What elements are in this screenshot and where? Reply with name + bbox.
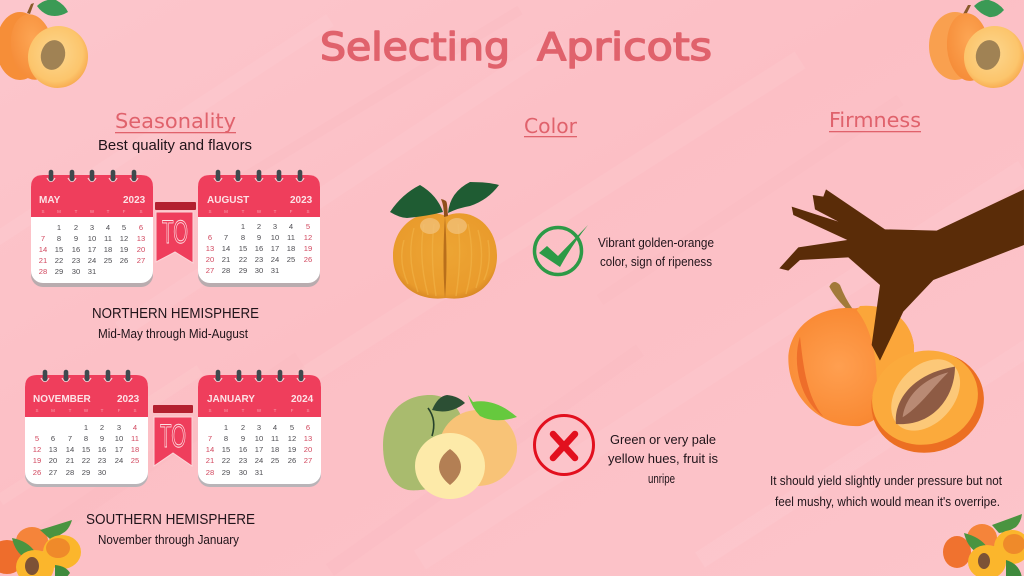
banner: to (south): TO <box>160 418 186 454</box>
calendar: August 2023: 1 <box>241 222 245 231</box>
calendar: August 2023: 3 <box>273 222 277 231</box>
calendar: August 2023: 29 <box>239 266 247 275</box>
calendar: January 2024: 7 <box>208 434 212 443</box>
calendar: January 2024: 18 <box>271 445 279 454</box>
calendar: May 2023: 5 <box>122 223 126 232</box>
calendar: August 2023: 23 <box>255 255 263 264</box>
calendar: August 2023: 7 <box>224 233 228 242</box>
calendar: August 2023: 8 <box>241 233 245 242</box>
calendar: May 2023: 25 <box>104 256 112 265</box>
calendar: January 2024: 31 <box>255 468 263 477</box>
calendar: August 2023: 26 <box>304 255 312 264</box>
calendar: January 2024 <box>198 372 321 487</box>
heading: color: Color <box>524 114 578 138</box>
calendar: November 2023: 24 <box>115 456 123 465</box>
calendar: November 2023: 30 <box>98 468 106 477</box>
calendar: November 2023: T <box>101 408 104 413</box>
calendar: November 2023: S <box>35 408 39 413</box>
calendar: January 2024: 12 <box>288 434 296 443</box>
calendar: January 2024: 22 <box>222 456 230 465</box>
calendar: August 2023: 6 <box>208 233 212 242</box>
calendar: November 2023: 18 <box>131 445 139 454</box>
calendar: November 2023: 4 <box>133 423 137 432</box>
label: northern hemisphere: NORTHERN HEMISPHERE <box>92 305 259 322</box>
calendar: May 2023: MAY <box>39 195 61 206</box>
calendar: August 2023: 31 <box>271 266 279 275</box>
calendar: November 2023: 12 <box>33 445 41 454</box>
calendar: August 2023: 28 <box>222 266 230 275</box>
text: unripe colour: unripe <box>648 472 675 486</box>
calendar: November 2023: 2 <box>100 423 104 432</box>
calendar: August 2023: 19 <box>304 244 312 253</box>
calendar: January 2024: 15 <box>222 445 230 454</box>
calendar: November 2023 <box>25 372 148 487</box>
calendar: May 2023: 29 <box>55 267 63 276</box>
calendar: January 2024: 16 <box>239 445 247 454</box>
calendar: August 2023: 2023 <box>290 195 313 206</box>
calendar: May 2023: 4 <box>106 223 110 232</box>
apricot stem <box>829 282 853 312</box>
title: Selecting <box>320 25 510 69</box>
calendar: January 2024: 1 <box>224 423 228 432</box>
calendar: November 2023: 11 <box>131 434 139 443</box>
text: southern dates: November through January <box>98 533 240 547</box>
calendar: May 2023 <box>31 172 153 287</box>
calendar: May 2023: S <box>41 209 45 214</box>
calendar: August 2023: S <box>208 209 212 214</box>
calendar: January 2024: T <box>274 408 277 413</box>
calendar: January 2024: 21 <box>206 456 214 465</box>
calendar: May 2023: 19 <box>120 245 128 254</box>
calendar: January 2024: T <box>242 408 245 413</box>
text: firmness description: It should yield slightly under pressure but not <box>770 474 1002 488</box>
calendar: May 2023: 18 <box>104 245 112 254</box>
calendar: August 2023: 20 <box>206 255 214 264</box>
calendar: January 2024: 13 <box>304 434 312 443</box>
calendar: August 2023: 11 <box>287 233 295 242</box>
calendar: May 2023: 24 <box>88 256 96 265</box>
calendar: November 2023: 20 <box>49 456 57 465</box>
text: firmness description <box>770 474 1002 509</box>
calendar: August 2023: 13 <box>206 244 214 253</box>
calendar: January 2024: 14 <box>206 445 214 454</box>
icon: apricot top left <box>0 0 94 94</box>
icon: apricots bottom left <box>0 520 81 576</box>
calendar: May 2023: 28 <box>39 267 47 276</box>
calendar: January 2024: F <box>291 408 294 413</box>
calendar: November 2023: 15 <box>82 445 90 454</box>
calendar: January 2024: 9 <box>241 434 245 443</box>
banner: to (south) <box>153 405 193 466</box>
calendar: January 2024: 3 <box>257 423 261 432</box>
calendar: January 2024: 25 <box>271 456 279 465</box>
calendar: August 2023: 5 <box>306 222 310 231</box>
calendar: May 2023: 14 <box>39 245 47 254</box>
calendar: August 2023: 21 <box>222 255 230 264</box>
calendar: January 2024: 2024 <box>291 394 314 405</box>
text: unripe colour: yellow hues, fruit is <box>608 452 718 466</box>
calendar: January 2024: JANUARY <box>207 394 255 405</box>
calendar: May 2023: T <box>75 209 78 214</box>
calendar: August 2023: T <box>242 209 245 214</box>
text: ripe colour <box>598 236 714 269</box>
calendar: November 2023: 14 <box>66 445 74 454</box>
calendar: May 2023: 10 <box>88 234 96 243</box>
calendar: August 2023: 2 <box>257 222 261 231</box>
calendar: November 2023: 5 <box>35 434 39 443</box>
calendar: November 2023: 7 <box>68 434 72 443</box>
calendar: August 2023: 18 <box>287 244 295 253</box>
calendar: November 2023: 8 <box>84 434 88 443</box>
calendar: August 2023: AUGUST <box>207 195 249 206</box>
calendar: May 2023: 11 <box>104 234 112 243</box>
calendar: August 2023: 12 <box>304 233 312 242</box>
calendar: November 2023: 6 <box>51 434 55 443</box>
banner: to (north) <box>155 202 196 263</box>
heading: firmness: Firmness <box>829 108 921 132</box>
calendar: May 2023: 16 <box>72 245 80 254</box>
calendar: January 2024: 10 <box>255 434 263 443</box>
calendar: May 2023: 27 <box>137 256 145 265</box>
calendar: May 2023: M <box>57 209 61 214</box>
calendar: August 2023: 25 <box>287 255 295 264</box>
calendar: November 2023: 25 <box>131 456 139 465</box>
calendar: May 2023: 21 <box>39 256 47 265</box>
calendar: August 2023: 30 <box>255 266 263 275</box>
calendar: May 2023: W <box>90 209 95 214</box>
calendar: August 2023 <box>198 172 320 287</box>
calendar: January 2024: 27 <box>304 456 312 465</box>
calendar: August 2023: 24 <box>271 255 279 264</box>
calendar: August 2023: 16 <box>255 244 263 253</box>
subheading: best quality: Best quality and flavors <box>98 137 252 154</box>
calendar: January 2024: 24 <box>255 456 263 465</box>
calendar: August 2023: F <box>290 209 293 214</box>
calendar: August 2023: 14 <box>222 244 230 253</box>
calendar: August 2023: M <box>224 209 228 214</box>
icon: red cross <box>534 416 594 474</box>
text: ripe colour: Vibrant golden-orange <box>598 236 714 250</box>
calendar: May 2023: 2 <box>74 223 78 232</box>
icon: ripe apricot <box>390 182 499 299</box>
calendar: November 2023: 28 <box>66 468 74 477</box>
calendar: May 2023: 20 <box>137 245 145 254</box>
calendar: November 2023: F <box>118 408 121 413</box>
calendar: August 2023: 9 <box>257 233 261 242</box>
calendar: May 2023: 7 <box>41 234 45 243</box>
calendar: May 2023: 9 <box>74 234 78 243</box>
calendar: January 2024: 6 <box>306 423 310 432</box>
calendar: January 2024: 11 <box>271 434 279 443</box>
calendar: May 2023: 17 <box>88 245 96 254</box>
calendar: May 2023: F <box>123 209 126 214</box>
calendar: November 2023: M <box>51 408 55 413</box>
calendar: August 2023: T <box>274 209 277 214</box>
calendar: November 2023: 23 <box>98 456 106 465</box>
calendar: January 2024: 20 <box>304 445 312 454</box>
label: southern hemisphere: SOUTHERN HEMISPHERE <box>86 511 255 528</box>
calendar: August 2023: 15 <box>239 244 247 253</box>
calendar: May 2023: 30 <box>72 267 80 276</box>
text: unripe colour: Green or very pale <box>610 433 716 447</box>
calendar: January 2024: 19 <box>288 445 296 454</box>
illustration: apricot squeezed by hand <box>779 189 1024 465</box>
text: firmness description: feel mushy, which would mean it's overripe. <box>775 495 1000 509</box>
calendar: May 2023: 2023 <box>123 195 146 206</box>
calendar: August 2023: 27 <box>206 266 214 275</box>
calendar: January 2024: M <box>224 408 228 413</box>
icon: apricots bottom right <box>943 514 1024 576</box>
calendar: November 2023: NOVEMBER <box>33 394 92 405</box>
calendar: May 2023: 8 <box>57 234 61 243</box>
calendar: May 2023: T <box>107 209 110 214</box>
calendar: May 2023: 3 <box>90 223 94 232</box>
halved apricot <box>860 339 995 465</box>
calendar: November 2023: 21 <box>66 456 74 465</box>
calendar: January 2024: 17 <box>255 445 263 454</box>
text: northern dates: Mid-May through Mid-August <box>98 327 248 341</box>
calendar: November 2023: S <box>133 408 137 413</box>
text: unripe colour <box>608 433 718 486</box>
calendar: January 2024: 2 <box>241 423 245 432</box>
calendar: January 2024: W <box>257 408 262 413</box>
calendar: November 2023: 26 <box>33 468 41 477</box>
calendar: November 2023: 22 <box>82 456 90 465</box>
banner: to (north): TO <box>162 214 188 250</box>
calendar: January 2024: 26 <box>288 456 296 465</box>
calendar: August 2023: 4 <box>289 222 293 231</box>
calendar: November 2023: 19 <box>33 456 41 465</box>
title: Apricots <box>537 25 712 69</box>
calendar: November 2023: 2023 <box>117 394 140 405</box>
title <box>320 25 712 69</box>
hand silhouette <box>779 189 1024 361</box>
calendar: May 2023: 1 <box>57 223 61 232</box>
calendar: May 2023: 12 <box>120 234 128 243</box>
calendar: May 2023: 15 <box>55 245 63 254</box>
heading: seasonality: Seasonality <box>115 109 236 133</box>
calendar: January 2024: 5 <box>290 423 294 432</box>
text: ripe colour: color, sign of ripeness <box>600 255 712 269</box>
calendar: November 2023: 16 <box>98 445 106 454</box>
calendar: January 2024: S <box>208 408 212 413</box>
calendar: May 2023: 22 <box>55 256 63 265</box>
calendar: November 2023: 29 <box>82 468 90 477</box>
calendar: November 2023: W <box>84 408 89 413</box>
calendar: August 2023: S <box>306 209 310 214</box>
calendar: November 2023: 3 <box>117 423 121 432</box>
calendar: May 2023: 13 <box>137 234 145 243</box>
calendar: November 2023: 27 <box>49 468 57 477</box>
calendar: November 2023: 10 <box>115 434 123 443</box>
calendar: January 2024: 28 <box>206 468 214 477</box>
calendar: January 2024: 29 <box>222 468 230 477</box>
icon: unripe apricots <box>383 395 517 499</box>
calendar: May 2023: 23 <box>72 256 80 265</box>
calendar: August 2023: 17 <box>271 244 279 253</box>
calendar: November 2023: 1 <box>84 423 88 432</box>
calendar: August 2023: 10 <box>271 233 279 242</box>
whole apricot <box>788 306 914 426</box>
calendar: January 2024: 30 <box>239 468 247 477</box>
calendar: January 2024: S <box>306 408 310 413</box>
calendar: May 2023: S <box>139 209 143 214</box>
calendar: January 2024: 8 <box>224 434 228 443</box>
calendar: November 2023: 17 <box>115 445 123 454</box>
calendar: August 2023: 22 <box>239 255 247 264</box>
calendar: January 2024: 4 <box>273 423 277 432</box>
calendar: January 2024: 23 <box>239 456 247 465</box>
icon: apricot top right <box>929 0 1024 94</box>
icon: green check <box>534 225 588 274</box>
calendar: August 2023: W <box>257 209 262 214</box>
calendar: May 2023: 26 <box>120 256 128 265</box>
calendar: November 2023: 9 <box>100 434 104 443</box>
calendar: May 2023: 31 <box>88 267 96 276</box>
calendar: November 2023: 13 <box>49 445 57 454</box>
calendar: November 2023: T <box>69 408 72 413</box>
calendar: May 2023: 6 <box>139 223 143 232</box>
